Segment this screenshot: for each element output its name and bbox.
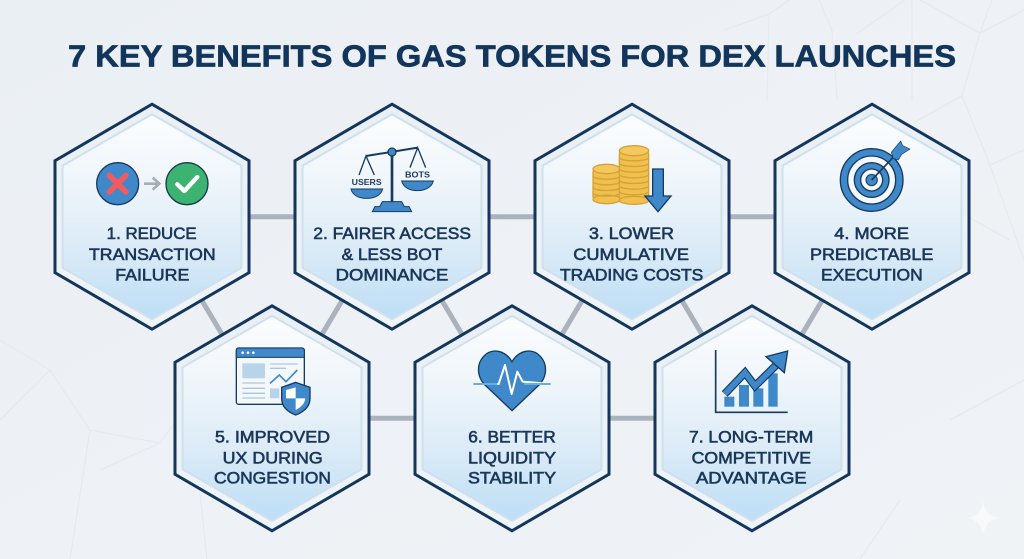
label: TRANSACTION — [89, 246, 216, 264]
label — [214, 429, 331, 488]
icon: sparkle watermark — [967, 501, 1000, 536]
panel: benefit 1 — [55, 104, 249, 329]
hexagon frame — [175, 306, 369, 531]
label: 1. REDUCE — [107, 225, 197, 243]
panel: benefit 3 — [535, 104, 729, 329]
label: 2. FAIRER ACCESS — [313, 225, 471, 243]
label: TRADING COSTS — [560, 267, 703, 285]
label: ADVANTAGE — [696, 470, 807, 488]
label: 4. MORE — [834, 225, 909, 243]
panel: benefit 5 — [175, 306, 369, 531]
icon: browser window with shield — [236, 348, 310, 415]
label — [689, 429, 813, 488]
hexagon frame — [775, 104, 969, 329]
icon: balance scales: USERS — [352, 178, 382, 187]
hexagon frame — [535, 104, 729, 329]
icon: balance scales: BOTS — [405, 170, 431, 179]
icon: balance scales — [351, 148, 433, 212]
label: LIQUIDITY — [468, 449, 556, 467]
panel: benefit 7 — [655, 306, 849, 531]
label: CUMULATIVE — [573, 246, 689, 264]
label: 5. IMPROVED — [215, 429, 330, 447]
icon: failure to success — [97, 163, 208, 205]
label: DOMINANCE — [336, 267, 448, 285]
hexagon frame — [55, 104, 249, 329]
label: STABILITY — [468, 470, 556, 488]
label: FAILURE — [115, 267, 189, 285]
label — [313, 225, 471, 285]
title: 7 KEY BENEFITS OF GAS TOKENS FOR DEX LAUNCHES — [68, 39, 956, 74]
panel: benefit 6 — [415, 306, 609, 531]
label: PREDICTABLE — [810, 246, 933, 264]
panel: benefit 4 — [775, 104, 969, 329]
label: 6. BETTER — [468, 429, 556, 447]
icon: target and dart — [840, 141, 910, 211]
hexagon frame — [415, 306, 609, 531]
label: CONGESTION — [214, 470, 331, 488]
hexagon frame — [655, 306, 849, 531]
label: EXECUTION — [821, 267, 923, 285]
label: 7. LONG-TERM — [689, 429, 813, 447]
label — [89, 225, 216, 285]
label — [468, 429, 556, 488]
icon: heart with pulse — [473, 351, 551, 411]
label: 3. LOWER — [589, 225, 674, 243]
icon: rising bar chart with arrow — [716, 350, 788, 412]
hexagon frame — [295, 104, 489, 329]
label: & LESS BOT — [342, 246, 442, 264]
panel: benefit 2 — [295, 104, 489, 329]
label: COMPETITIVE — [692, 449, 811, 467]
label: UX DURING — [223, 449, 323, 467]
connectors between hexagons — [152, 217, 872, 418]
label — [560, 225, 703, 285]
icon: coins and down arrow — [593, 146, 671, 212]
label — [810, 225, 933, 285]
